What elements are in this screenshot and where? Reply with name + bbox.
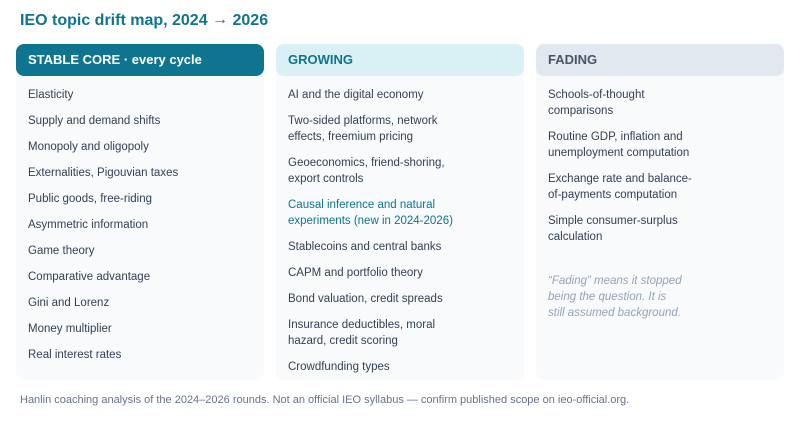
panel: stable core	[16, 44, 264, 380]
list: growing topics: hazard, credit scoring	[288, 335, 398, 347]
list: stable core topics: Asymmetric information	[28, 219, 148, 231]
list: growing topics: Geoeconomics, friend-shoring,	[288, 157, 445, 169]
list: stable core topics: Monopoly and oligopoly	[28, 141, 149, 153]
list: stable core topics: Elasticity	[28, 89, 73, 101]
list: growing topics: Two-sided platforms, network	[288, 115, 438, 127]
list: growing topics: Causal inference and natural	[288, 199, 435, 211]
list: fading topics: unemployment computation	[548, 147, 689, 159]
heading: growing: GROWING	[288, 52, 353, 67]
list: stable core topics: Supply and demand shifts	[28, 115, 160, 127]
heading: stable core: STABLE CORE · every cycle	[28, 52, 202, 67]
list: fading topics	[548, 89, 692, 243]
list: growing topics	[288, 89, 453, 373]
list: growing topics: export controls	[288, 173, 363, 185]
list: stable core topics: Comparative advantage	[28, 271, 150, 283]
list: growing topics: AI and the digital economy	[288, 89, 424, 101]
list: growing topics: Stablecoins and central banks	[288, 241, 441, 253]
callout: meaning of fading: still assumed background.	[548, 307, 681, 319]
list: growing topics: Crowdfunding types	[288, 361, 390, 373]
list: stable core topics: Game theory	[28, 245, 94, 257]
callout: meaning of fading: “Fading” means it stopped	[548, 275, 682, 287]
list: stable core topics: Public goods, free-riding	[28, 193, 152, 205]
callout: meaning of fading	[548, 275, 682, 319]
list: fading topics: calculation	[548, 231, 602, 243]
panel: fading	[536, 44, 784, 380]
list: stable core topics	[28, 89, 178, 361]
list: stable core topics: Money multiplier	[28, 323, 112, 335]
list: fading topics: Simple consumer-surplus	[548, 215, 678, 227]
list: growing topics: experiments (new in 2024-2026)	[288, 215, 453, 227]
list: fading topics: Schools-of-thought	[548, 89, 645, 101]
list: stable core topics: Externalities, Pigouvian taxes	[28, 167, 178, 179]
list: growing topics: Bond valuation, credit spreads	[288, 293, 443, 305]
list: fading topics: Routine GDP, inflation and	[548, 131, 683, 143]
list: stable core topics: Gini and Lorenz	[28, 297, 109, 309]
list: stable core topics: Real interest rates	[28, 349, 121, 361]
heading: stable core	[16, 44, 264, 76]
heading: growing	[276, 44, 524, 76]
list: growing topics: effects, freemium pricing	[288, 131, 413, 143]
title: IEO topic drift map, 2024 → 2026	[20, 11, 268, 29]
footnote: Hanlin coaching analysis of the 2024–2026 rounds. Not an official IEO syllabus — confirm published scope on ieo-official.org.	[20, 394, 629, 406]
callout: meaning of fading: being the question. It is	[548, 291, 666, 303]
list: fading topics: of-payments computation	[548, 189, 677, 201]
list: fading topics: Exchange rate and balance-	[548, 173, 692, 185]
list: growing topics: CAPM and portfolio theory	[288, 267, 423, 279]
list: growing topics: Insurance deductibles, moral	[288, 319, 435, 331]
list: fading topics: comparisons	[548, 105, 613, 117]
heading: fading	[536, 44, 784, 76]
heading: fading: FADING	[548, 52, 597, 67]
panel: growing	[276, 44, 524, 380]
